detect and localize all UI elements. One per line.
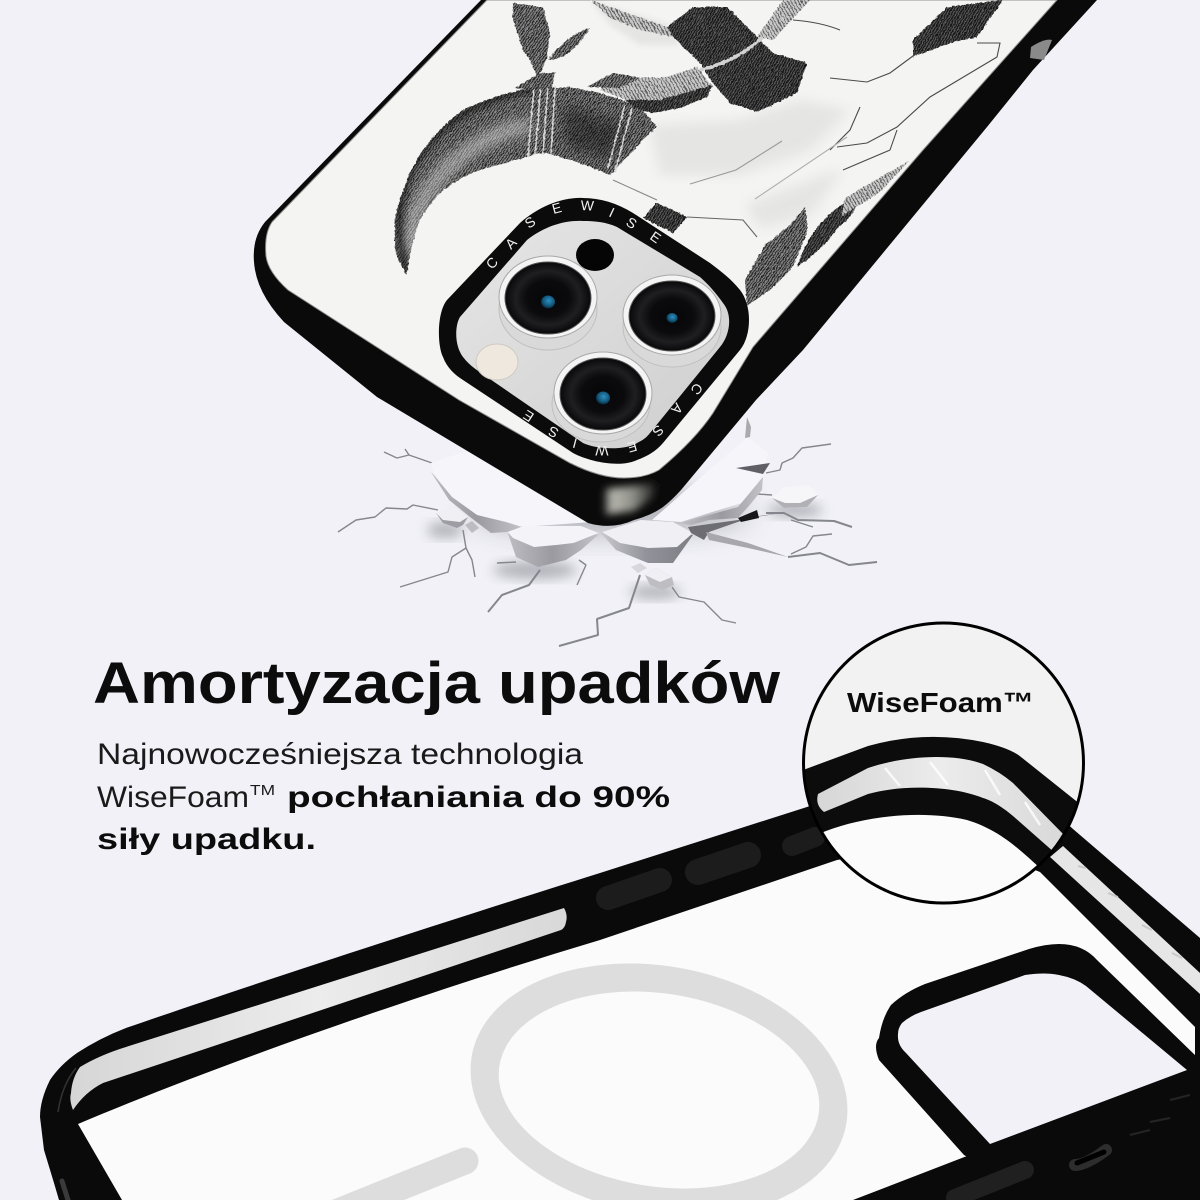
circle label: WiseFoam™ <box>847 687 1034 718</box>
rope on left horn <box>528 85 632 172</box>
brand text: lower ring: CASEWISE <box>520 380 706 459</box>
frame gloss <box>58 1068 76 1112</box>
artwork: bull skull sketch <box>380 0 1003 306</box>
camera ring <box>439 198 749 464</box>
lens: bottom <box>552 352 652 442</box>
bumper <box>254 0 1097 526</box>
horn: lower stub <box>643 203 687 233</box>
magnetic ring <box>474 968 844 1200</box>
brow strand light <box>600 66 714 100</box>
upward rope strand <box>757 0 810 40</box>
horn: lower right <box>745 207 808 306</box>
brand text: upper ring: CASEWISE <box>482 197 664 272</box>
rope on upper horn <box>700 38 762 70</box>
heading: Amortyzacja upadków <box>93 651 781 716</box>
bumper gloss highlight <box>604 483 657 515</box>
centre-left slab <box>508 526 598 567</box>
bottom phone case interior <box>40 764 1200 1200</box>
clear back window <box>78 840 1195 1200</box>
speaker slot <box>62 1181 68 1200</box>
lens: top left <box>499 256 597 350</box>
camera cut-out ring <box>876 944 1200 1170</box>
feather tuft <box>515 72 555 90</box>
body copy <box>97 738 670 856</box>
feather: top small <box>548 28 590 60</box>
sketched parts <box>380 0 1003 306</box>
camera cut-out opening <box>898 974 1187 1144</box>
bottom bar details <box>1075 1150 1106 1165</box>
feather: top left <box>513 3 550 78</box>
skull soft shading <box>590 0 850 228</box>
feather: lower right <box>797 200 855 267</box>
screen back panel <box>266 0 1057 478</box>
body copy: pochłaniania do 90% <box>287 781 670 814</box>
dark patch upper right <box>913 0 1003 57</box>
horn: upper band and eye socket <box>667 7 807 112</box>
body copy: siły upadku. <box>97 823 316 856</box>
flash <box>476 344 518 380</box>
crack lines <box>338 444 877 646</box>
magnetic alignment pill <box>338 1161 465 1200</box>
foam strip: long side <box>70 908 567 1110</box>
small right rock <box>772 485 818 508</box>
centre-right slab <box>600 522 693 563</box>
body copy: TM <box>250 782 275 799</box>
side button highlight <box>1030 40 1052 60</box>
left slab <box>431 440 620 527</box>
outer black frame <box>40 764 1200 1200</box>
lens: right <box>623 275 721 367</box>
microphone hole <box>576 239 614 271</box>
WiseFoam magnifier circle <box>802 622 1085 904</box>
foam strip: right side <box>1050 846 1200 994</box>
body copy: Najnowocześniejsza technologia <box>97 738 583 771</box>
small bottom rocks <box>631 563 647 573</box>
magnified frame corner <box>805 736 1076 902</box>
side buttons <box>608 837 815 898</box>
skull contour lines <box>613 20 1000 237</box>
camera bed <box>456 221 729 448</box>
skull ridge <box>590 0 673 37</box>
cracked floor impact <box>338 417 877 646</box>
horn: left large <box>394 86 657 274</box>
right slab <box>652 437 768 522</box>
brow strand dark <box>625 85 713 113</box>
body copy: WiseFoam <box>97 781 249 814</box>
top phone with case <box>254 0 1097 526</box>
camera module <box>439 197 749 464</box>
soft shadows around the crater <box>427 490 823 599</box>
small left rocks <box>436 513 468 528</box>
